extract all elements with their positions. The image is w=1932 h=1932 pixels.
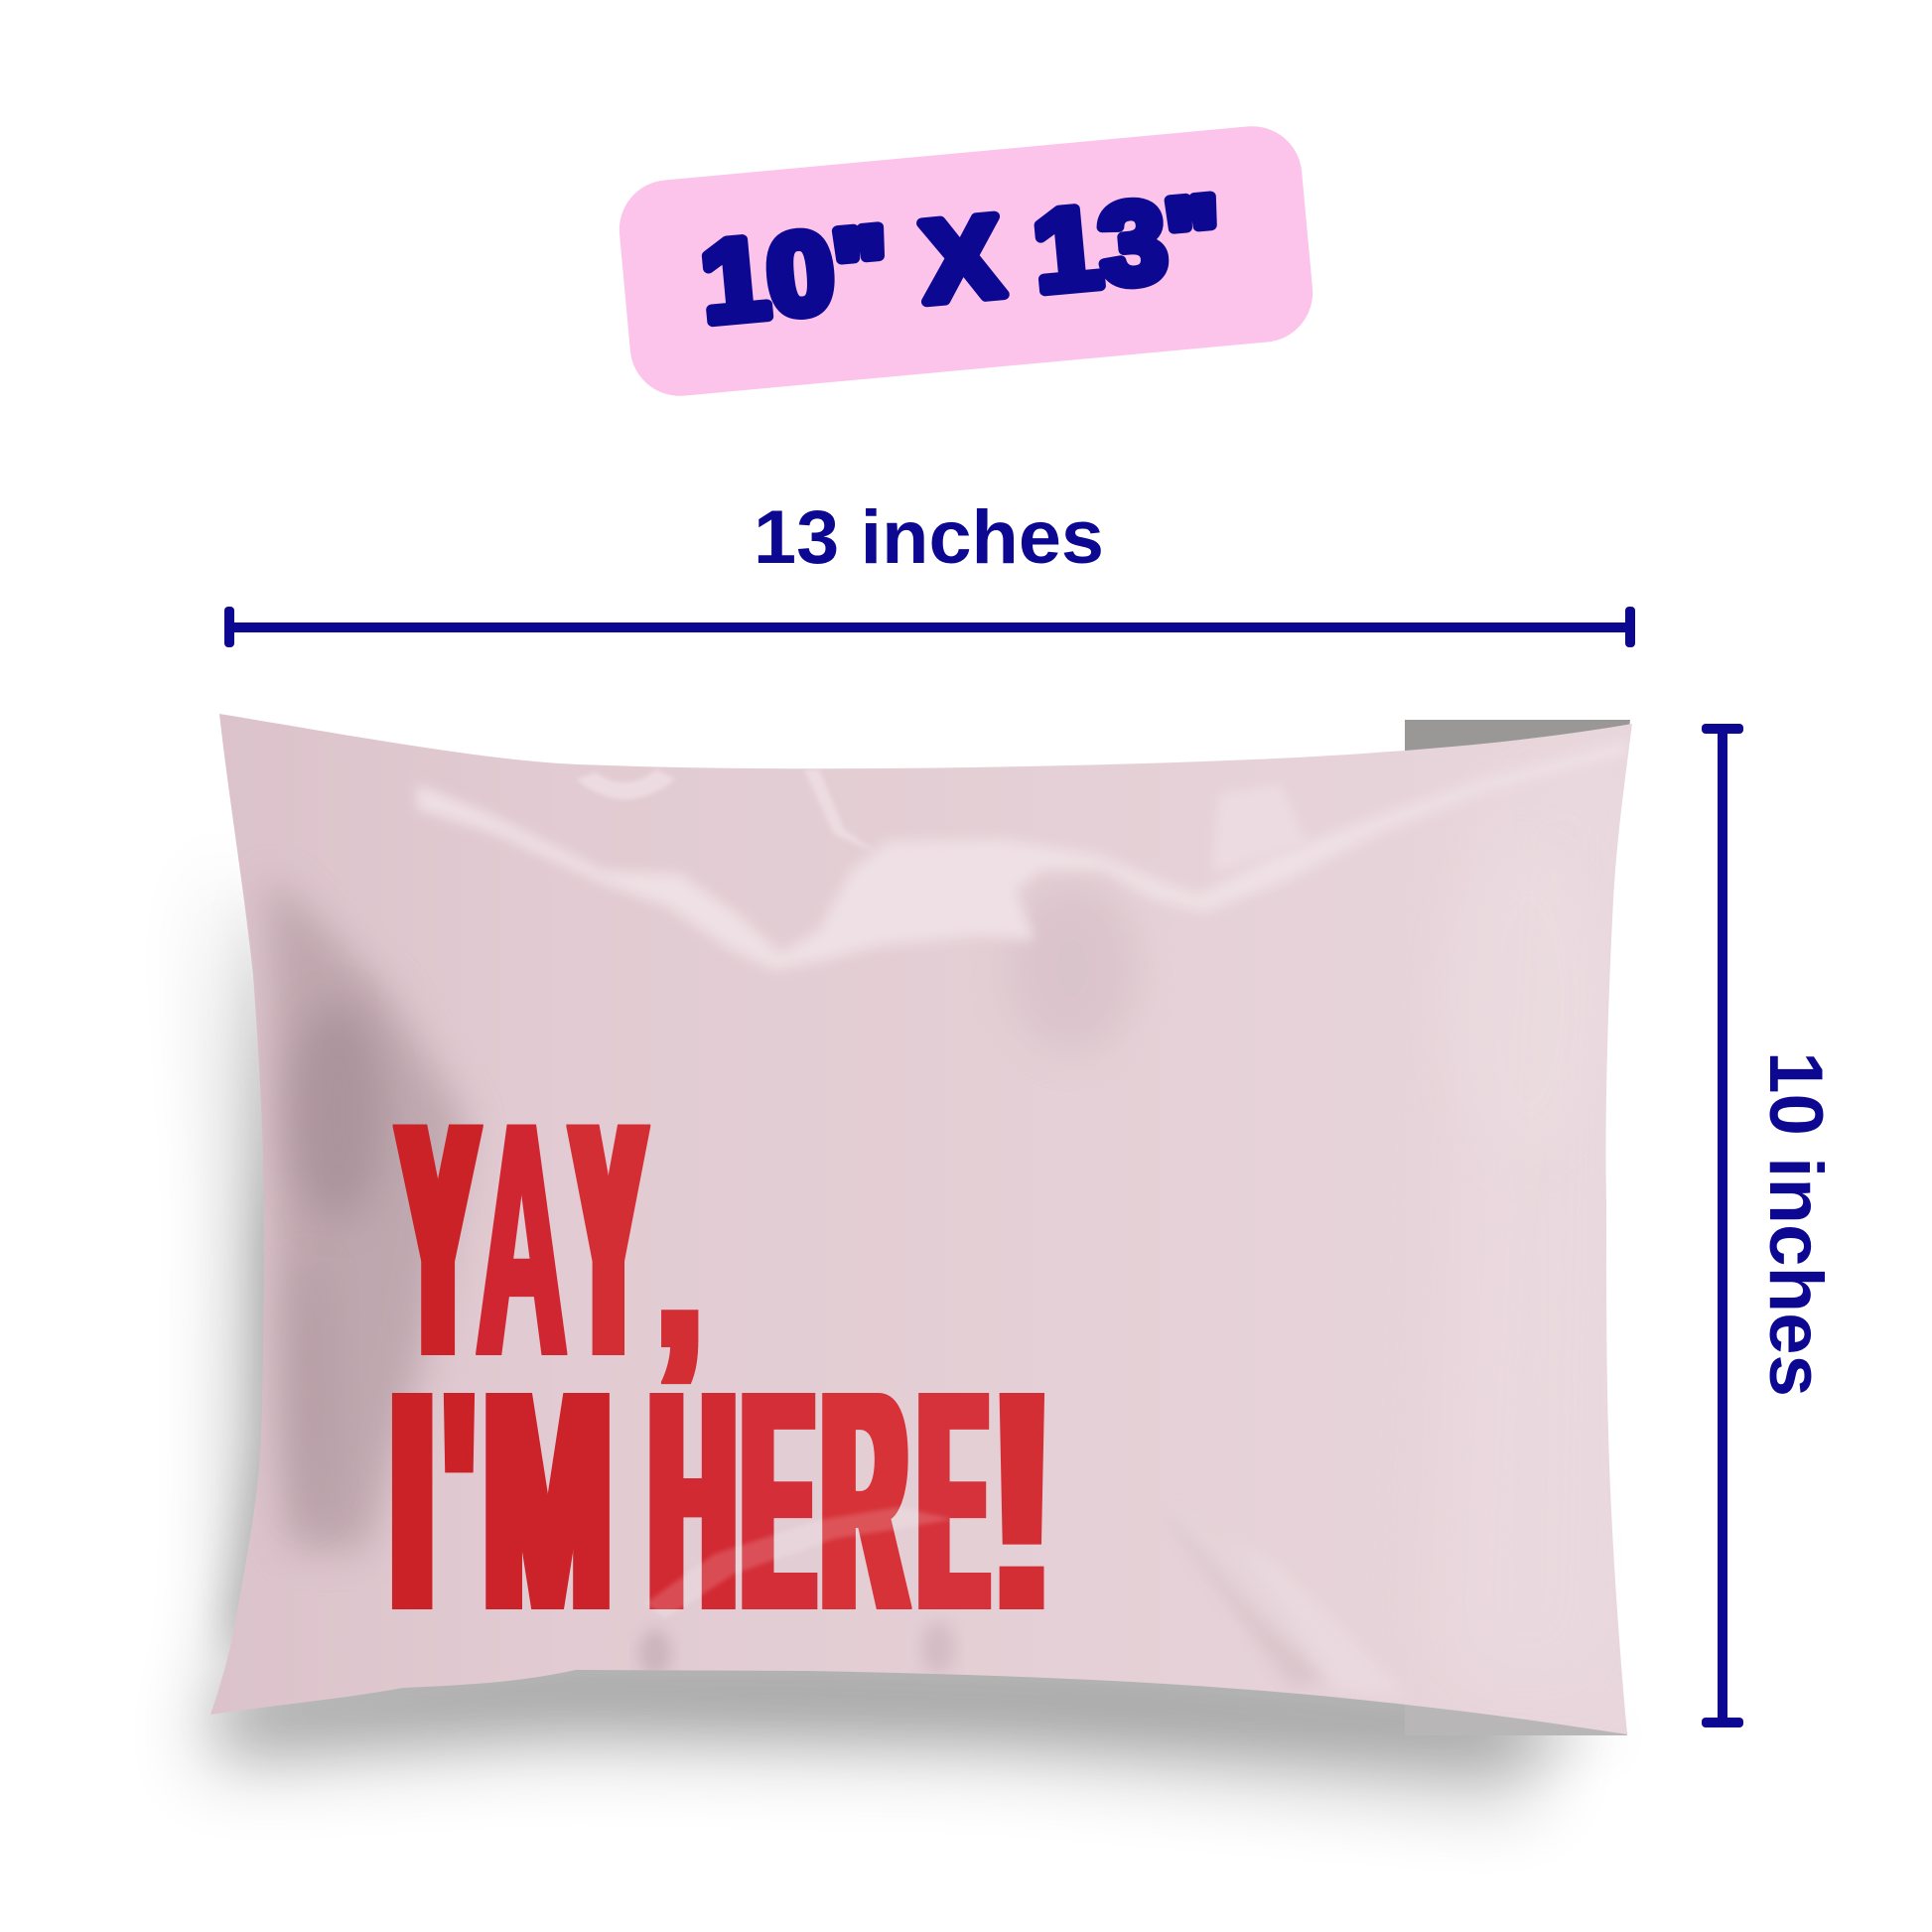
slogan line 2: H bbox=[650, 1327, 735, 1676]
slogan line 2: I bbox=[389, 1326, 435, 1676]
slogan line 2: ! bbox=[989, 1325, 1054, 1675]
slogan line 2: ' bbox=[447, 1326, 472, 1675]
gloss over slogan bbox=[645, 1507, 953, 1618]
gloss ridge bbox=[417, 740, 1628, 970]
slogan comma: , bbox=[659, 1131, 700, 1397]
grey back flap bbox=[1405, 720, 1630, 1735]
slogan bbox=[389, 1053, 1054, 1676]
slogan line 2: R bbox=[823, 1327, 905, 1676]
bag body bbox=[210, 714, 1632, 1734]
slogan line 1 bbox=[399, 1053, 644, 1426]
badge text: 10" X 13" bbox=[696, 173, 1228, 346]
height arrow bbox=[1702, 724, 1743, 1727]
mailer bag bbox=[210, 714, 1632, 1734]
bag shading and highlights bbox=[268, 735, 1628, 1698]
label: size badge bbox=[615, 122, 1317, 400]
height label: 10 inches bbox=[1753, 1051, 1838, 1397]
slogan line 1: A bbox=[477, 1053, 567, 1426]
width arrow bbox=[224, 607, 1635, 647]
slogan line 2: E bbox=[920, 1327, 987, 1675]
mailer shadow bbox=[199, 844, 1627, 1802]
slogan line 2 bbox=[389, 1325, 1054, 1676]
slogan line 2: M bbox=[484, 1327, 612, 1675]
slogan line 1: Y bbox=[399, 1054, 477, 1426]
slogan line 1: Y bbox=[573, 1053, 644, 1425]
slogan line 2: E bbox=[744, 1326, 813, 1675]
width label: 13 inches bbox=[754, 495, 1104, 580]
badge pill bbox=[615, 122, 1317, 400]
